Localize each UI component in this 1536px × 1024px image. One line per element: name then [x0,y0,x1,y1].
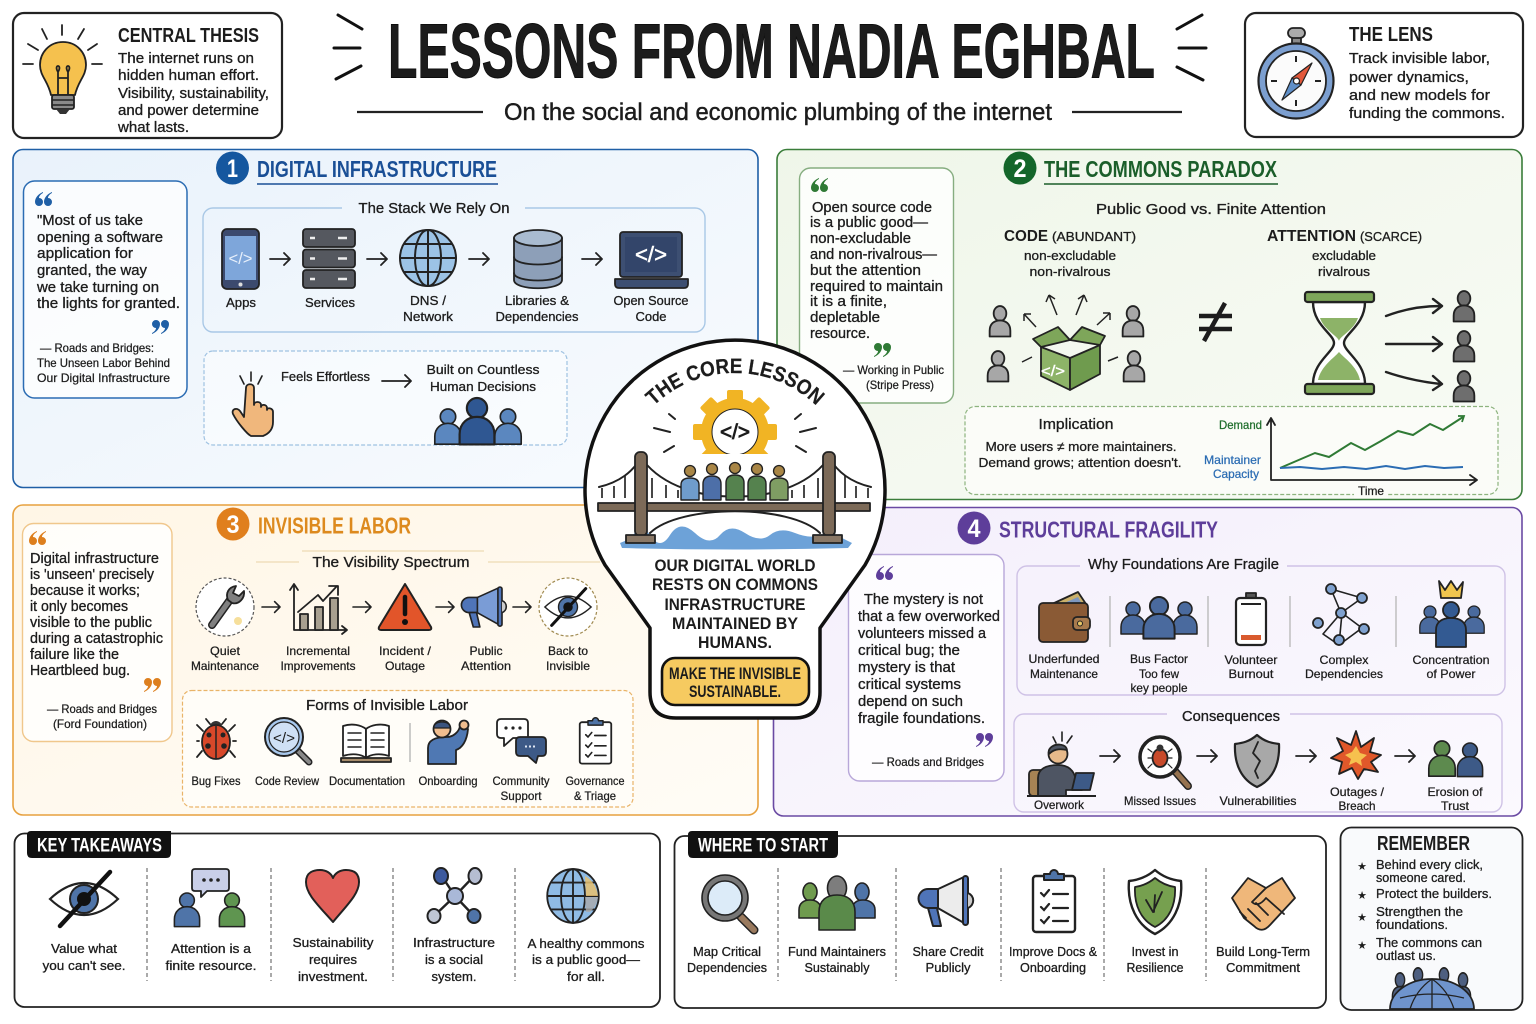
labels: forms: Code Review [255,774,319,788]
text: core statement: INFRASTRUCTURE [664,596,806,614]
quote box 2: non-excludable [810,231,911,247]
illustration: suspension bridge [598,452,871,550]
heading: the core lesson: THE CORE LESSON [644,358,826,405]
list: remember items: Protect the builders. [1376,886,1492,901]
icon: governance clipboard [580,718,611,764]
labels: fragile foundations: key people [1130,681,1188,695]
labels: consequences: Missed Issues [1124,794,1196,808]
step: long-term commitment: Build Long-Term [1216,944,1310,959]
text: thesis body: Visibility, sustainability, [118,86,269,102]
labels: stack [226,293,688,324]
takeaway: healthy commons: is a public good— [532,952,640,967]
labels: spectrum: Quiet [210,644,241,658]
text: lens body [1349,51,1505,122]
labels: fragile foundations: Underfunded [1028,652,1100,666]
takeaway: infrastructure is a social system [413,868,495,984]
labels: forms: Support [500,789,542,803]
labels: fragile foundations: Volunteer [1224,653,1278,667]
labels: spectrum: Outage [385,659,425,673]
labels: consequences [1034,785,1483,813]
panel 1: digital infrastructure [13,150,758,488]
labels: fragile foundations: Too few [1139,667,1179,681]
panel: feels effortless [204,351,567,445]
quote box 3: (Ford Foundation) [53,717,147,731]
labels: consequences: Outages / [1330,785,1385,799]
comparison: attention [1267,228,1474,402]
icon: bus factor people [1121,597,1197,639]
comparison: code: (ABUNDANT) [1052,229,1136,244]
comparison: attention: (SCARCE) [1360,229,1422,244]
labels: fragile foundations: Bus Factor [1130,652,1188,666]
icon: open code box with people: </> [1041,363,1065,380]
icon: wrench [196,578,254,636]
quote box 3: visible to the public [30,615,152,631]
takeaway: healthy commons: for all. [567,969,605,984]
quote box 3: Digital infrastructure [30,551,159,567]
decoration: title rays right [1177,15,1206,80]
quote box 3: during a catastrophic [30,631,163,647]
badge number 4 [958,512,990,544]
quote box 4: critical bug; the [858,643,960,659]
panel: where to start [674,831,1326,1008]
badge number 3: 3 [226,511,240,539]
quote box 1: granted, the way [37,263,148,279]
step: fund maintainers: Fund Maintainers [788,944,886,959]
labels: consequences: Vulnerabilities [1220,794,1296,808]
panel: feels effortless: Feels Effortless [281,369,370,384]
icon: servers [303,229,355,288]
heading: invisible labor: INVISIBLE LABOR [258,512,411,538]
badge number 1: 1 [227,155,238,183]
icon: code review magnifier: </> [273,730,295,747]
panel: implication: Demand grows; attention doesn't. [978,455,1182,470]
labels: forms: & Triage [574,789,616,803]
arrows: attention to people [1386,299,1442,390]
heading: remember: REMEMBER [1377,833,1470,855]
takeaway: sustainability requires investment: requires [309,952,358,967]
step: improve docs: Improve Docs & [1009,944,1097,959]
heading: central thesis: CENTRAL THESIS [118,25,259,47]
arrow [382,375,411,387]
icon: pointing hand [233,372,273,436]
icon: lightbulb [23,25,102,114]
labels: stack: DNS / [410,293,446,308]
list: remember items: Strengthen the [1376,904,1463,919]
panel: consequences: Consequences [1182,709,1280,725]
labels: spectrum: Incremental [286,644,350,658]
takeaway: infrastructure is a social system: Infrastructure [413,935,495,950]
takeaway: attention is finite: Attention is a [171,941,252,956]
people on bridge [681,462,788,500]
quote box 2 [800,168,954,403]
quote box 4: that a few overworked [858,609,1000,625]
comparison: code: non-rivalrous [1030,264,1111,279]
labels: spectrum: Improvements [280,659,356,673]
comparison: code: non-excludable [1024,248,1116,263]
section: the visibility spectrum [191,551,600,673]
text: lens body: funding the commons. [1349,106,1505,122]
panel: feels effortless: Human Decisions [430,379,537,394]
quote box 2: (Stripe Press) [866,378,934,392]
tag: key takeaways [27,831,171,858]
panel: implication: Implication [1038,417,1114,433]
comparison: attention: excludable [1312,248,1376,263]
labels: consequences: Breach [1338,799,1376,813]
quote box 3: because it works; [30,583,140,599]
badge number 4: 4 [968,515,981,543]
takeaway: value what you can't see: Value what [51,941,117,956]
list: remember items: ★ [1357,890,1367,902]
comparison: attention: rivalrous [1318,264,1371,279]
arrows: consequences [1100,750,1415,762]
quote box 2: it is a finite, [810,294,887,310]
icon: open book [341,725,391,762]
icon: people receiving attention [1454,291,1474,402]
text: lens body: power dynamics, [1349,70,1469,86]
decoration: title rays left [334,15,362,79]
quote box 2: Open source code [812,200,932,216]
quote box 4: mystery is that [858,660,955,676]
subtitle: On the social and economic plumbing of the internet [504,99,1052,126]
quote box 4: critical systems [858,677,961,693]
list: remember items: outlast us. [1376,948,1436,963]
icon: low battery [1236,593,1266,645]
text: thesis body: hidden human effort. [118,68,259,84]
quote box 1: we take turning on [36,280,159,296]
labels: stack: Services [305,295,355,310]
chart: demand vs maintainer capacity: Time [1358,484,1384,498]
labels: consequences: Overwork [1034,798,1085,812]
text: core statement: HUMANS. [698,634,772,652]
icon: apps phone [222,229,259,289]
panel: forms of invisible labor: Forms of Invisible Labor [306,698,468,714]
labels: fragile foundations: of Power [1426,667,1476,681]
icon: ladybug [197,719,236,759]
icon: crown and people [1420,581,1484,647]
labels: spectrum: Maintenance [191,659,259,673]
quote box 1: "Most of us take [37,213,143,229]
tag: where to start [688,831,838,858]
text: core statement [652,557,818,652]
labels: consequences: Trust [1441,799,1470,813]
icon: apps phone: </> [228,249,253,268]
text: thesis body: and power determine [118,103,259,119]
badge number 1 [216,152,249,184]
panel: central thesis [13,13,282,138]
comparison: code [988,228,1144,390]
step: map critical dependencies [687,875,767,975]
panel 2: the commons paradox [777,150,1522,500]
labels: consequences: Erosion of [1428,785,1483,799]
step: long-term commitment [1216,878,1310,975]
quote box 1: the lights for granted. [37,296,180,312]
quote box 2: — Working in Public [843,363,944,377]
section: the visibility spectrum: The Visibility Spectrum [312,555,470,571]
labels: forms [192,774,625,803]
quote box 4 [848,554,1004,781]
quote box 4: fragile foundations. [858,711,985,727]
quote box 4: — Roads and Bridges [872,755,984,769]
list: remember items: Behind every click, [1376,857,1483,872]
quote box 3: failure like the [30,647,119,663]
icon: warning triangle [379,584,431,630]
step: invest in resilience: Resilience [1126,960,1184,975]
labels: spectrum: Incident / [379,644,432,658]
quote box 2: is a public good— [810,215,929,231]
quote box 3: — Roads and Bridges [47,702,157,716]
quote box 1 [24,181,187,398]
labels: forms: Governance [566,774,625,788]
icon: globe [400,230,456,286]
badge number 2: 2 [1014,155,1026,183]
panel: the stack we rely on: The Stack We Rely On [358,201,510,217]
panel: forms of invisible labor [182,690,633,807]
quote box 2: but the attention [810,263,921,279]
step: improve docs [1009,870,1097,975]
text: lens body: and new models for [1349,88,1490,104]
step: map critical dependencies: Dependencies [687,960,767,975]
panel: feels effortless: Built on Countless [426,362,540,377]
list: remember items [1357,857,1492,963]
text: thesis body: The internet runs on [118,51,254,67]
text: thesis body: what lasts. [117,120,189,136]
badge number 2 [1004,152,1036,184]
labels: fragile foundations: Maintenance [1030,667,1098,681]
quote box 1: Our Digital Infrastructure [37,371,170,385]
panel: consequences [1014,709,1502,813]
icon: dependency network [1313,584,1369,645]
callout: make the invisible sustainable: SUSTAINABLE. [689,682,781,701]
list: remember items: foundations. [1376,917,1448,932]
symbol: not equal [1199,303,1232,341]
labels: spectrum: Public [470,644,502,658]
takeaway: sustainability requires investment: Sustainability [292,935,374,950]
quote box 1: opening a software [37,230,163,246]
center badge: the core lesson [583,338,887,720]
panel: the lens [1245,13,1523,137]
takeaway: attention is finite [166,869,256,973]
icon: compass [1258,28,1334,118]
icon: people around globe [1390,968,1474,1009]
quote box 3: it only becomes [30,599,128,615]
labels: fragile foundations: Burnout [1228,667,1274,681]
takeaway: value what you can't see [42,872,126,973]
labels: fragile foundations: Complex [1320,653,1368,667]
takeaway: value what you can't see: you can't see. [42,958,126,973]
panel: why foundations are fragile [1017,557,1505,695]
labels: stack: Network [403,309,454,324]
step: improve docs: Onboarding [1020,960,1086,975]
panel: implication [965,406,1498,498]
quote box 3: is 'unseen' precisely [30,567,155,583]
step: share credit: Publicly [926,960,971,975]
panel 3: invisible labor [13,505,758,815]
step: fund maintainers [788,876,886,975]
quote box 2: and non-rivalrous— [810,247,937,263]
list: remember items: ★ [1357,912,1367,924]
step: map critical dependencies: Map Critical [693,944,761,959]
icon: megaphone [461,587,506,627]
quote box 3: Heartbleed bug. [30,663,130,679]
panel 4: structural fragility [774,508,1522,816]
step: invest in resilience [1126,870,1184,975]
list: remember items: The commons can [1376,935,1482,950]
list: remember items: ★ [1357,861,1367,873]
step: invest in resilience: Invest in [1132,944,1178,959]
heading: structural fragility: STRUCTURAL FRAGILITY [999,516,1218,542]
icon: overworked person at laptop [1027,732,1096,796]
labels: spectrum [191,644,590,673]
labels: forms: Bug Fixes [192,774,240,788]
labels: spectrum: Back to [548,644,588,658]
icon: hidden eye [539,578,597,636]
step: share credit: Share Credit [912,944,984,959]
quote box 3 [22,524,172,742]
quote box 1: application for [37,246,133,262]
text: core statement: MAINTAINED BY [672,615,798,633]
panel: the stack we rely on [203,201,705,332]
callout: make the invisible sustainable [662,658,809,705]
icon: people [435,398,521,444]
quote box 4: depend on such [858,694,963,710]
callout: make the invisible sustainable: MAKE THE INVISIBLE [669,664,801,683]
takeaway: sustainability requires investment [292,870,374,984]
text: thesis body [117,51,269,136]
comparison: code: CODE [1004,228,1048,245]
title block [334,8,1206,126]
labels: spectrum: Attention [461,659,511,673]
heading: digital infrastructure: DIGITAL INFRASTRUCTURE [257,156,497,182]
labels: stack: Code [636,309,666,324]
icon: database [514,230,562,288]
icon: gear with code [654,373,816,491]
badge number 3 [216,508,250,540]
tag: where to start: WHERE TO START [698,836,828,856]
takeaway: attention is finite: finite resource. [166,958,256,973]
icon: magnifier with bug [1140,737,1188,786]
tag: key takeaways: KEY TAKEAWAYS [37,836,162,856]
panel: key takeaways [14,831,660,1007]
labels: stack: Dependencies [496,309,579,324]
takeaway: healthy commons [528,869,645,984]
quote box 2: depletable [810,310,880,326]
icon: hourglass [1305,292,1374,394]
panel: implication: More users ≠ more maintainers. [986,439,1176,454]
quote box 4: volunteers missed a [858,626,987,642]
chart: demand vs maintainer capacity: Capacity [1213,467,1259,481]
quote box 1: — Roads and Bridges: [40,341,154,355]
heading: public good vs finite attention: Public Good vs. Finite Attention [1096,202,1326,218]
step: long-term commitment: Commitment [1226,960,1300,975]
icon: open code box with people [988,295,1144,390]
text: lens body: Track invisible labor, [1349,51,1490,67]
chart: demand vs maintainer capacity: Maintainer [1204,453,1261,467]
icon: onboarding person [428,720,468,764]
labels: stack: Libraries & [505,293,569,308]
step: share credit [912,876,984,975]
labels: forms: Onboarding [418,774,478,788]
list: remember items: ★ [1357,940,1367,952]
labels: fragile foundations: Dependencies [1305,667,1383,681]
takeaway: healthy commons: A healthy commons [528,936,645,951]
takeaway: infrastructure is a social system: system. [432,969,476,984]
icon: eroded trust people [1429,741,1483,777]
icon: laptop: </> [635,242,667,267]
panel: remember [1340,828,1522,1010]
panel: why foundations are fragile: Why Foundations Are Fragile [1088,557,1279,573]
icon: cracked shield [1235,735,1279,787]
icon: explosion [1331,731,1381,779]
icon: wallet [1039,592,1090,642]
quote box 2: required to maintain [810,279,943,295]
quote box 2: resource. [810,326,870,342]
quote box 1: The Unseen Labor Behind [37,356,170,370]
text: core statement: RESTS ON COMMONS [652,576,818,594]
chart: demand vs maintainer capacity [1204,416,1477,498]
text: core statement: OUR DIGITAL WORLD [654,557,816,575]
icon: chat bubbles [497,719,546,763]
icon: rising chart [290,584,347,634]
icon: code review magnifier [265,718,309,762]
step: fund maintainers: Sustainably [804,960,870,975]
icon: laptop [615,232,688,288]
takeaway: infrastructure is a social system: is a social [425,952,483,967]
labels: forms: Documentation [329,774,405,788]
comparison: attention: ATTENTION [1267,228,1356,245]
labels: stack: Apps [226,295,256,310]
heading: the commons paradox: THE COMMONS PARADOX [1044,156,1278,182]
labels: fragile foundations [1028,652,1490,695]
labels: stack: Open Source [614,293,688,308]
heading: the lens: THE LENS [1349,24,1433,46]
takeaway: sustainability requires investment: investment. [298,969,368,984]
chart: demand vs maintainer capacity: Demand [1219,418,1262,432]
labels: spectrum: Invisible [546,659,590,673]
quote box 4: The mystery is not [864,592,983,608]
arrows: spectrum [262,602,531,612]
labels: forms: Community [492,774,550,788]
labels: fragile foundations: Concentration [1412,653,1490,667]
list: remember items: someone cared. [1376,870,1466,885]
icon: gear with code: </> [720,421,750,444]
arrows: stack flow [270,253,602,265]
